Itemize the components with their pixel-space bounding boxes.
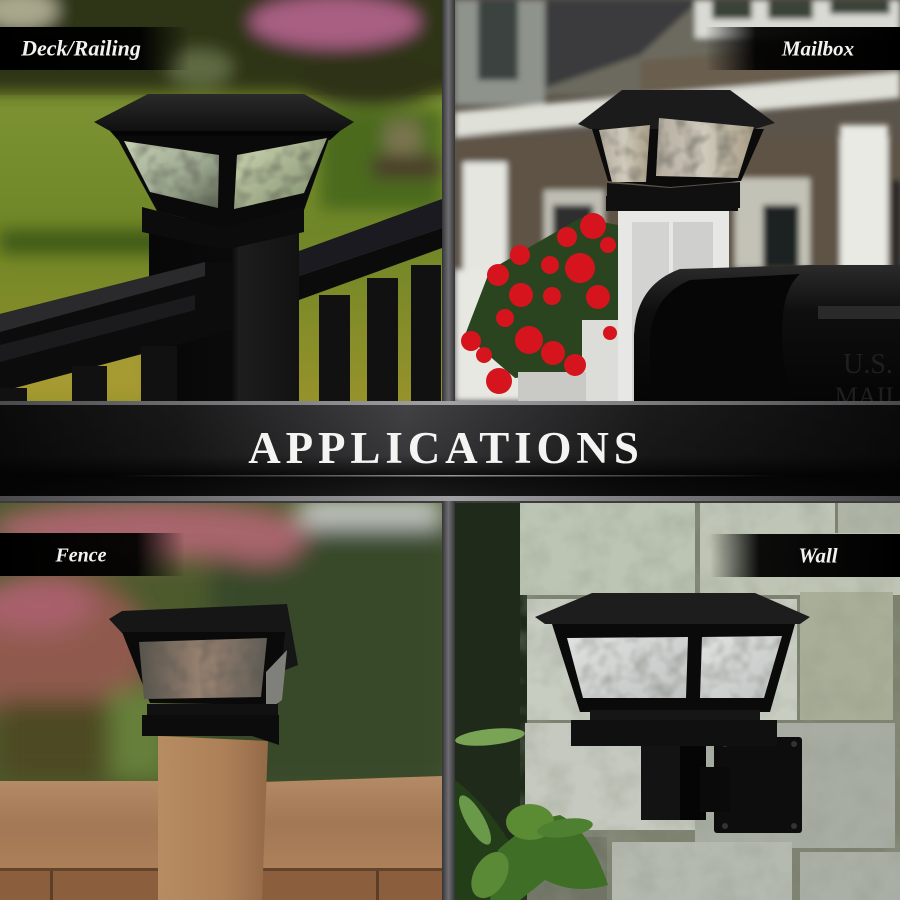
label: Mailbox: Mailbox	[781, 36, 854, 60]
label: Deck/Railing	[0, 27, 190, 70]
panel: wall	[453, 503, 900, 900]
deck balusters	[0, 265, 441, 401]
deck post	[0, 199, 442, 401]
mailbox lamp	[578, 90, 775, 208]
fence boards	[0, 776, 442, 900]
stone texture	[520, 503, 900, 900]
panel: fence	[0, 498, 450, 900]
vertical divider	[442, 0, 455, 900]
red flowers	[461, 213, 618, 401]
title: APPLICATIONS	[248, 423, 644, 473]
wall bracket	[641, 737, 802, 833]
label: Wall: Wall	[798, 544, 838, 568]
label: Wall	[710, 534, 900, 577]
panel: mailbox	[455, 0, 900, 411]
mailbox	[634, 265, 900, 411]
title band	[0, 401, 900, 501]
label: Mailbox	[705, 27, 900, 70]
fence post	[158, 736, 268, 900]
label: Deck/Railing: Deck/Railing	[20, 36, 141, 60]
panel: deck railing	[0, 0, 460, 401]
label: Fence: Fence	[54, 544, 107, 566]
mailbox: U.S.	[843, 349, 893, 380]
deck lamp	[94, 94, 354, 250]
stone wall	[520, 503, 900, 900]
fence lamp	[109, 604, 298, 745]
green leaves	[453, 725, 608, 900]
label: Fence	[0, 533, 185, 576]
mailbox: MAIL	[835, 382, 900, 411]
mailbox post	[606, 196, 738, 401]
wall lamp	[535, 593, 810, 746]
